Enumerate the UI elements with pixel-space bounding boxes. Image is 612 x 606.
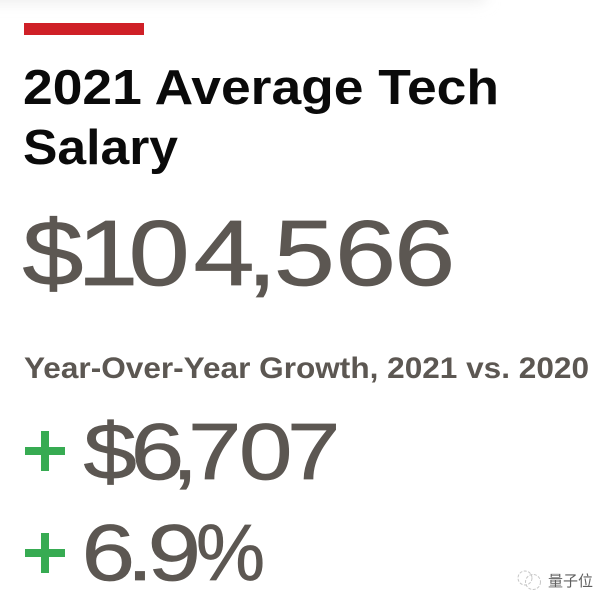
- icon: green plus: [25, 533, 65, 573]
- average salary figure: $104,566: [22, 201, 455, 305]
- dollar growth value: $6,707: [83, 407, 340, 496]
- percent growth value: [82, 508, 265, 597]
- icon: chat bubbles: [518, 571, 540, 590]
- percent growth value: %: [196, 508, 265, 597]
- title: Salary: [23, 121, 178, 175]
- percent growth row: [25, 508, 265, 597]
- title: 2021 Average Tech: [23, 61, 499, 115]
- dollar growth row: [25, 407, 340, 496]
- watermark text: 量子位: [548, 573, 593, 590]
- icon: green plus: [25, 431, 65, 471]
- title: [23, 61, 499, 175]
- red accent bar: [24, 23, 144, 35]
- watermark: [518, 571, 593, 590]
- percent growth value: 6.9: [82, 508, 201, 597]
- growth subheading: Year-Over-Year Growth, 2021 vs. 2020: [24, 352, 589, 385]
